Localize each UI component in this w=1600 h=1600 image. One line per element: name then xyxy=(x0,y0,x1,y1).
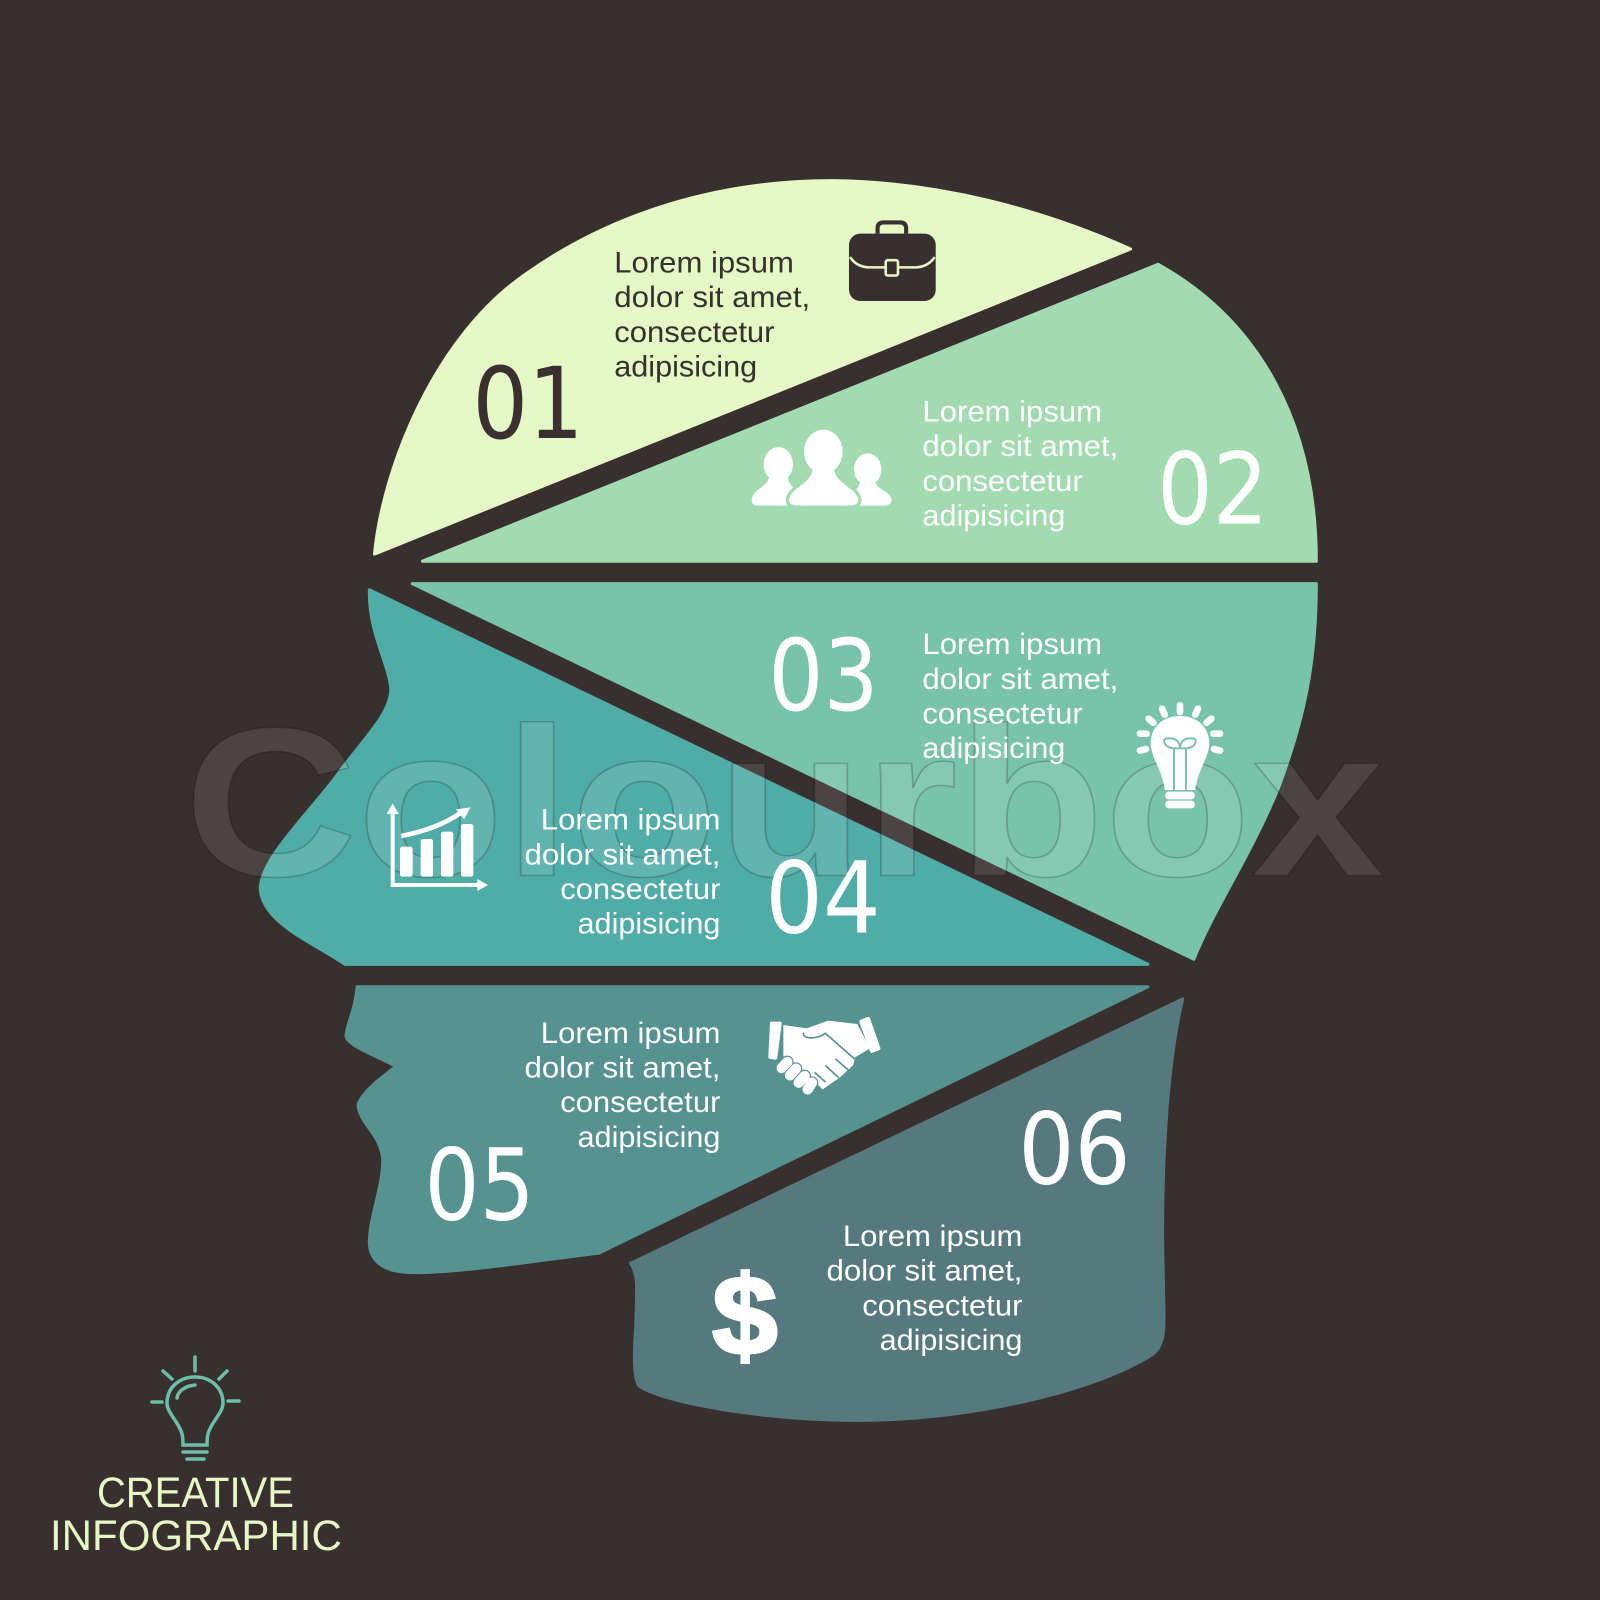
icon: handshake xyxy=(768,1017,880,1089)
segment 02 shape xyxy=(422,264,1316,561)
logo: outlined light bulb xyxy=(152,1357,239,1459)
panel 05 text: consectetur xyxy=(560,1086,721,1119)
panel 02 text: dolor sit amet, xyxy=(922,430,1118,463)
watermark: Colourbox xyxy=(184,684,1385,921)
segment 01 shape xyxy=(374,181,1131,554)
panel 01 text: consectetur xyxy=(614,316,775,349)
panel 03 text: consectetur xyxy=(922,697,1083,730)
panel 03 text: Lorem ipsum xyxy=(922,628,1102,661)
panel 04 text xyxy=(524,804,721,941)
panel 03 text xyxy=(922,628,1118,765)
panel 04 text: adipisicing xyxy=(578,908,720,941)
panel 05 text: Lorem ipsum xyxy=(541,1017,720,1050)
number 01: 01 xyxy=(472,347,584,462)
panel 06 text: adipisicing xyxy=(880,1324,1022,1357)
panel 06 text xyxy=(827,1220,1023,1357)
panel 06 text: Lorem ipsum xyxy=(843,1220,1022,1253)
panel 06 text: consectetur xyxy=(862,1289,1023,1322)
panel 06 text: dolor sit amet, xyxy=(827,1255,1022,1288)
panel 03 text: adipisicing xyxy=(922,732,1065,765)
logo title: CREATIVE xyxy=(97,1469,294,1517)
segment 06 shape xyxy=(631,999,1183,1420)
segment 05 shape xyxy=(346,987,1148,1273)
panel 01 text: dolor sit amet, xyxy=(614,281,810,314)
panel 02 text: adipisicing xyxy=(922,500,1065,533)
number 02: 02 xyxy=(1157,432,1268,547)
head diagram xyxy=(260,181,1316,1420)
icon: bar chart xyxy=(387,803,488,891)
segment 03 shape xyxy=(412,584,1316,959)
panel 01 text: adipisicing xyxy=(614,351,757,384)
segment 04 shape xyxy=(260,590,1148,964)
panel 02 text: consectetur xyxy=(922,465,1083,498)
panel 04 text: Lorem ipsum xyxy=(541,804,720,837)
number 06: 06 xyxy=(1018,1093,1131,1208)
number 05: 05 xyxy=(424,1128,535,1243)
panel 01 text: Lorem ipsum xyxy=(614,246,794,279)
icon: briefcase xyxy=(849,222,936,301)
logo title: INFOGRAPHIC xyxy=(50,1512,342,1560)
panel 04 text: consectetur xyxy=(560,873,721,906)
panel 01 text xyxy=(614,246,810,384)
panel 04 text: dolor sit amet, xyxy=(524,838,720,871)
icon: people xyxy=(752,430,892,507)
panel 02 text xyxy=(922,395,1118,533)
logo title xyxy=(50,1469,342,1560)
panel 05 text xyxy=(524,1017,721,1154)
panel 03 text: dolor sit amet, xyxy=(922,663,1118,696)
panel 05 text: adipisicing xyxy=(578,1121,720,1154)
number 03: 03 xyxy=(768,619,879,734)
icon: dollar sign: $ xyxy=(712,1252,778,1378)
panel 05 text: dolor sit amet, xyxy=(524,1052,720,1085)
panel 02 text: Lorem ipsum xyxy=(922,395,1102,428)
icon: light bulb xyxy=(1140,705,1220,808)
number 04: 04 xyxy=(765,842,881,957)
